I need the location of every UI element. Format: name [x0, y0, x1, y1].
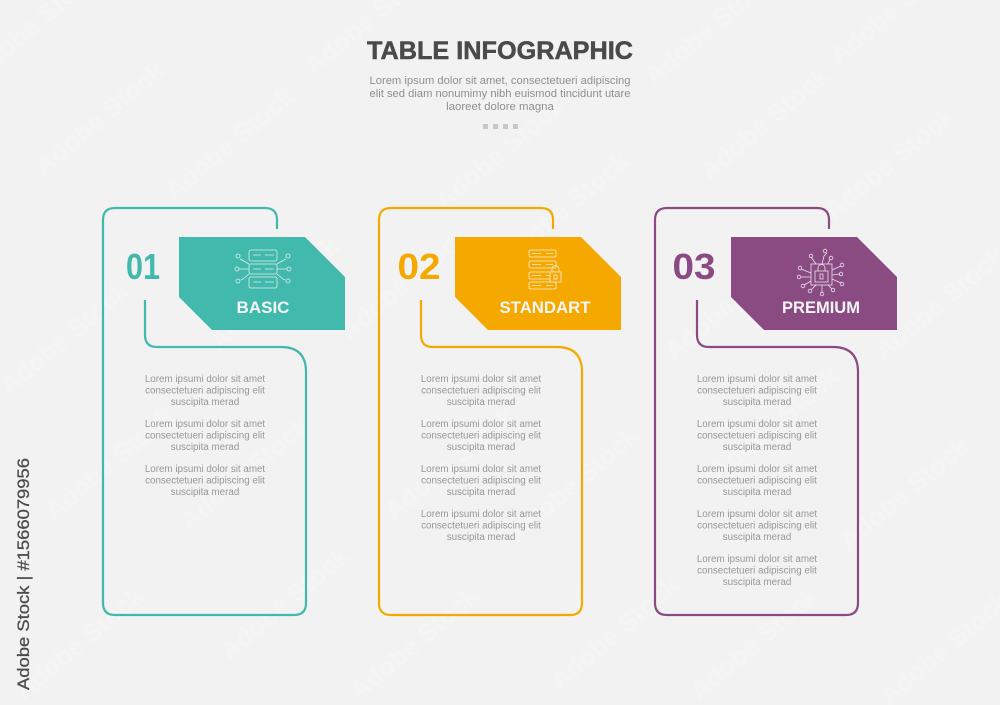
body text: standart: suscipita merad [447, 487, 515, 498]
stock id side text: Adobe Stock | #1566079956 [14, 458, 33, 690]
body text: basic: consectetueri adipiscing elit [145, 476, 265, 486]
text: Adobe Stock [214, 540, 355, 666]
body text: premium: consectetueri adipiscing elit [697, 386, 817, 396]
panel outline: basic [103, 208, 306, 615]
text: Adobe Stock [834, 430, 975, 556]
body text: basic: Lorem ipsumi dolor sit amet [145, 464, 265, 475]
subtitle text block: Lorem ipsum dolor sit amet, consectetueri adipiscing [370, 75, 630, 87]
text: Adobe Stock [544, 570, 685, 696]
text: Adobe Stock [494, 145, 635, 271]
body text: premium: suscipita merad [723, 577, 791, 588]
icon: server with padlock [529, 250, 561, 289]
text: Adobe Stock [694, 60, 835, 186]
panel: premium [655, 208, 897, 615]
text: Adobe Stock [379, 400, 520, 526]
panel: basic [103, 208, 345, 615]
body text: premium: Lorem ipsumi dolor sit amet [697, 464, 817, 475]
panel outline: standart [379, 208, 582, 615]
text: Adobe Stock [174, 410, 315, 536]
icon: server network [235, 250, 291, 288]
panel outline: premium [655, 208, 858, 615]
text: Adobe Stock [819, 100, 960, 226]
body text: premium: suscipita merad [723, 532, 791, 543]
body text: basic [145, 374, 265, 498]
body text: premium: consectetueri adipiscing elit [697, 476, 817, 486]
number 02: 02 [398, 246, 440, 287]
panel: standart [379, 208, 621, 615]
body text: standart: Lorem ipsumi dolor sit amet [421, 464, 541, 475]
body text: standart: consectetueri adipiscing elit [421, 430, 541, 442]
body text: standart [421, 374, 541, 543]
body text: premium: Lorem ipsumi dolor sit amet [697, 374, 817, 385]
body text: basic: suscipita merad [171, 397, 239, 408]
body text: premium: suscipita merad [723, 442, 791, 453]
text: Adobe Stock [9, 580, 150, 705]
body text: basic: suscipita merad [171, 442, 239, 453]
body text: standart: suscipita merad [447, 442, 515, 453]
body text: standart: suscipita merad [447, 532, 515, 543]
body text: standart: suscipita merad [447, 397, 515, 408]
text: Adobe Stock [159, 80, 300, 206]
number 03: 03 [672, 246, 716, 287]
label: standart: STANDART [500, 298, 591, 317]
text: Adobe Stock [204, 230, 345, 356]
number 01: 01 [126, 246, 160, 287]
body text: premium: Lorem ipsumi dolor sit amet [697, 509, 817, 520]
title dots [483, 124, 518, 129]
body text: basic: Lorem ipsumi dolor sit amet [145, 419, 265, 430]
header tab: standart [455, 237, 621, 330]
body text: premium: consectetueri adipiscing elit [697, 430, 817, 442]
body text: premium: consectetueri adipiscing elit [697, 520, 817, 532]
text: Adobe Stock [684, 580, 825, 705]
body text: premium: suscipita merad [723, 397, 791, 408]
text: Adobe Stock [344, 580, 485, 705]
body text: basic: consectetueri adipiscing elit [145, 430, 265, 442]
text: Adobe Stock [39, 400, 180, 526]
body text: premium: consectetueri adipiscing elit [697, 566, 817, 576]
header tab: premium [731, 237, 897, 330]
label: basic: BASIC [237, 298, 289, 317]
body text: premium: Lorem ipsumi dolor sit amet [697, 419, 817, 430]
body text: standart: Lorem ipsumi dolor sit amet [421, 509, 541, 520]
text: Adobe Stock [429, 90, 570, 216]
body text: premium: Lorem ipsumi dolor sit amet [697, 554, 817, 565]
body text: standart: consectetueri adipiscing elit [421, 520, 541, 532]
subtitle text block: elit sed diam nonumimy nibh euismod tincidunt utare [370, 88, 630, 100]
body text: standart: Lorem ipsumi dolor sit amet [421, 374, 541, 385]
text: Adobe Stock [334, 220, 475, 346]
subtitle text block: laoreet dolore magna [446, 101, 554, 113]
title: TABLE INFOGRAPHIC [367, 37, 633, 65]
body text: premium: suscipita merad [723, 487, 791, 498]
body text: basic: consectetueri adipiscing elit [145, 386, 265, 396]
body text: basic: suscipita merad [171, 487, 239, 498]
text: Adobe Stock [29, 55, 170, 181]
header tab: basic [179, 237, 345, 330]
text: Adobe Stock [504, 420, 645, 546]
body text: standart: Lorem ipsumi dolor sit amet [421, 419, 541, 430]
icon: circuit padlock [797, 249, 844, 296]
label: premium: PREMIUM [782, 298, 860, 317]
text: Adobe Stock [704, 360, 845, 486]
body text: premium [697, 374, 817, 588]
subtitle text block [370, 75, 630, 113]
text: Adobe Stock [659, 240, 800, 366]
body text: standart: consectetueri adipiscing elit [421, 386, 541, 396]
body text: standart: consectetueri adipiscing elit [421, 476, 541, 486]
body text: basic: Lorem ipsumi dolor sit amet [145, 374, 265, 385]
